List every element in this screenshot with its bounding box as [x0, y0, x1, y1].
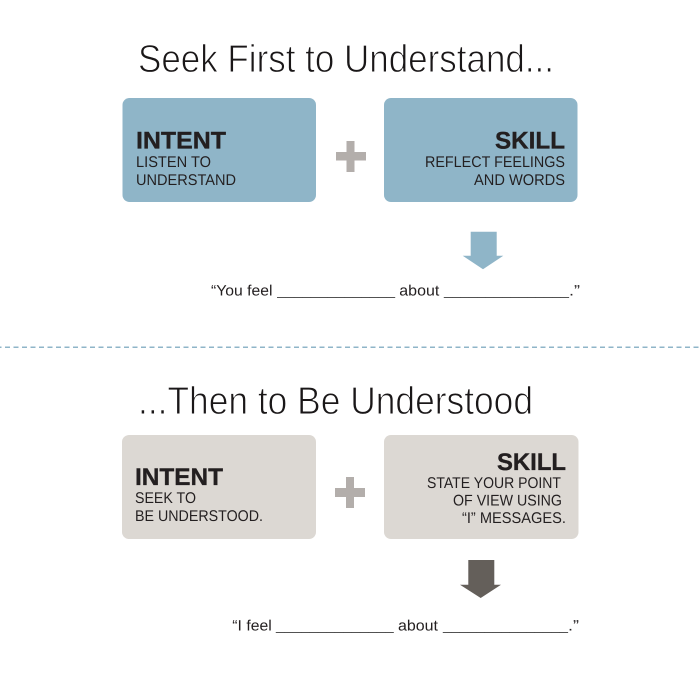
text: listen to understand: UNDERSTAND	[136, 172, 236, 189]
text: you feel sentence: _______________	[443, 282, 570, 299]
text: seek to be understood: SEEK TO	[135, 490, 196, 507]
arrow: dark down	[460, 560, 501, 598]
text: you feel sentence: ______________	[276, 282, 396, 299]
panel: skill, reflect	[384, 98, 578, 202]
text: seek to be understood: BE UNDERSTOOD.	[135, 508, 263, 525]
section: seek first to understand	[122, 38, 580, 300]
title: Then to Be Understood: ...Then to Be Understood	[138, 380, 533, 423]
text: you feel sentence: “You feel	[211, 282, 272, 300]
heading: SKILL: SKILL	[497, 449, 566, 476]
text: state your point of view	[427, 475, 566, 527]
text: state your point of view: STATE YOUR POINT	[427, 475, 561, 492]
text: you feel sentence: .”	[569, 282, 580, 300]
arrow: blue down	[463, 232, 503, 269]
heading: INTENT: INTENT	[136, 128, 226, 154]
text: state your point of view: “I” MESSAGES.	[462, 510, 566, 527]
text: i feel sentence	[232, 617, 579, 635]
text: i feel sentence: _______________	[442, 617, 569, 634]
text: i feel sentence: ______________	[275, 617, 394, 634]
text: you feel sentence	[211, 282, 580, 300]
heading: SKILL: SKILL	[495, 128, 565, 154]
heading: INTENT: INTENT	[135, 464, 223, 491]
text: state your point of view: OF VIEW USING	[453, 492, 562, 510]
text: you feel sentence: about	[399, 282, 440, 300]
text: seek to be understood	[135, 490, 263, 525]
title: Seek First to Understand: Seek First to Understand...	[138, 38, 554, 81]
panel: intent, seek	[122, 435, 316, 539]
icon: plus	[336, 141, 366, 172]
text: reflect feelings and words: REFLECT FEELINGS	[425, 154, 565, 171]
section: then to be understood	[122, 380, 579, 635]
text: i feel sentence: “I feel	[232, 618, 272, 635]
text: listen to understand: LISTEN TO	[136, 154, 211, 171]
panel: skill, state	[384, 435, 578, 539]
icon: plus	[335, 477, 365, 508]
text: reflect feelings and words: AND WORDS	[474, 172, 565, 189]
text: i feel sentence: .”	[568, 618, 579, 635]
panel: intent, listen	[122, 98, 316, 202]
text: listen to understand	[136, 154, 236, 189]
text: reflect feelings and words	[425, 154, 565, 189]
text: i feel sentence: about	[398, 618, 439, 635]
